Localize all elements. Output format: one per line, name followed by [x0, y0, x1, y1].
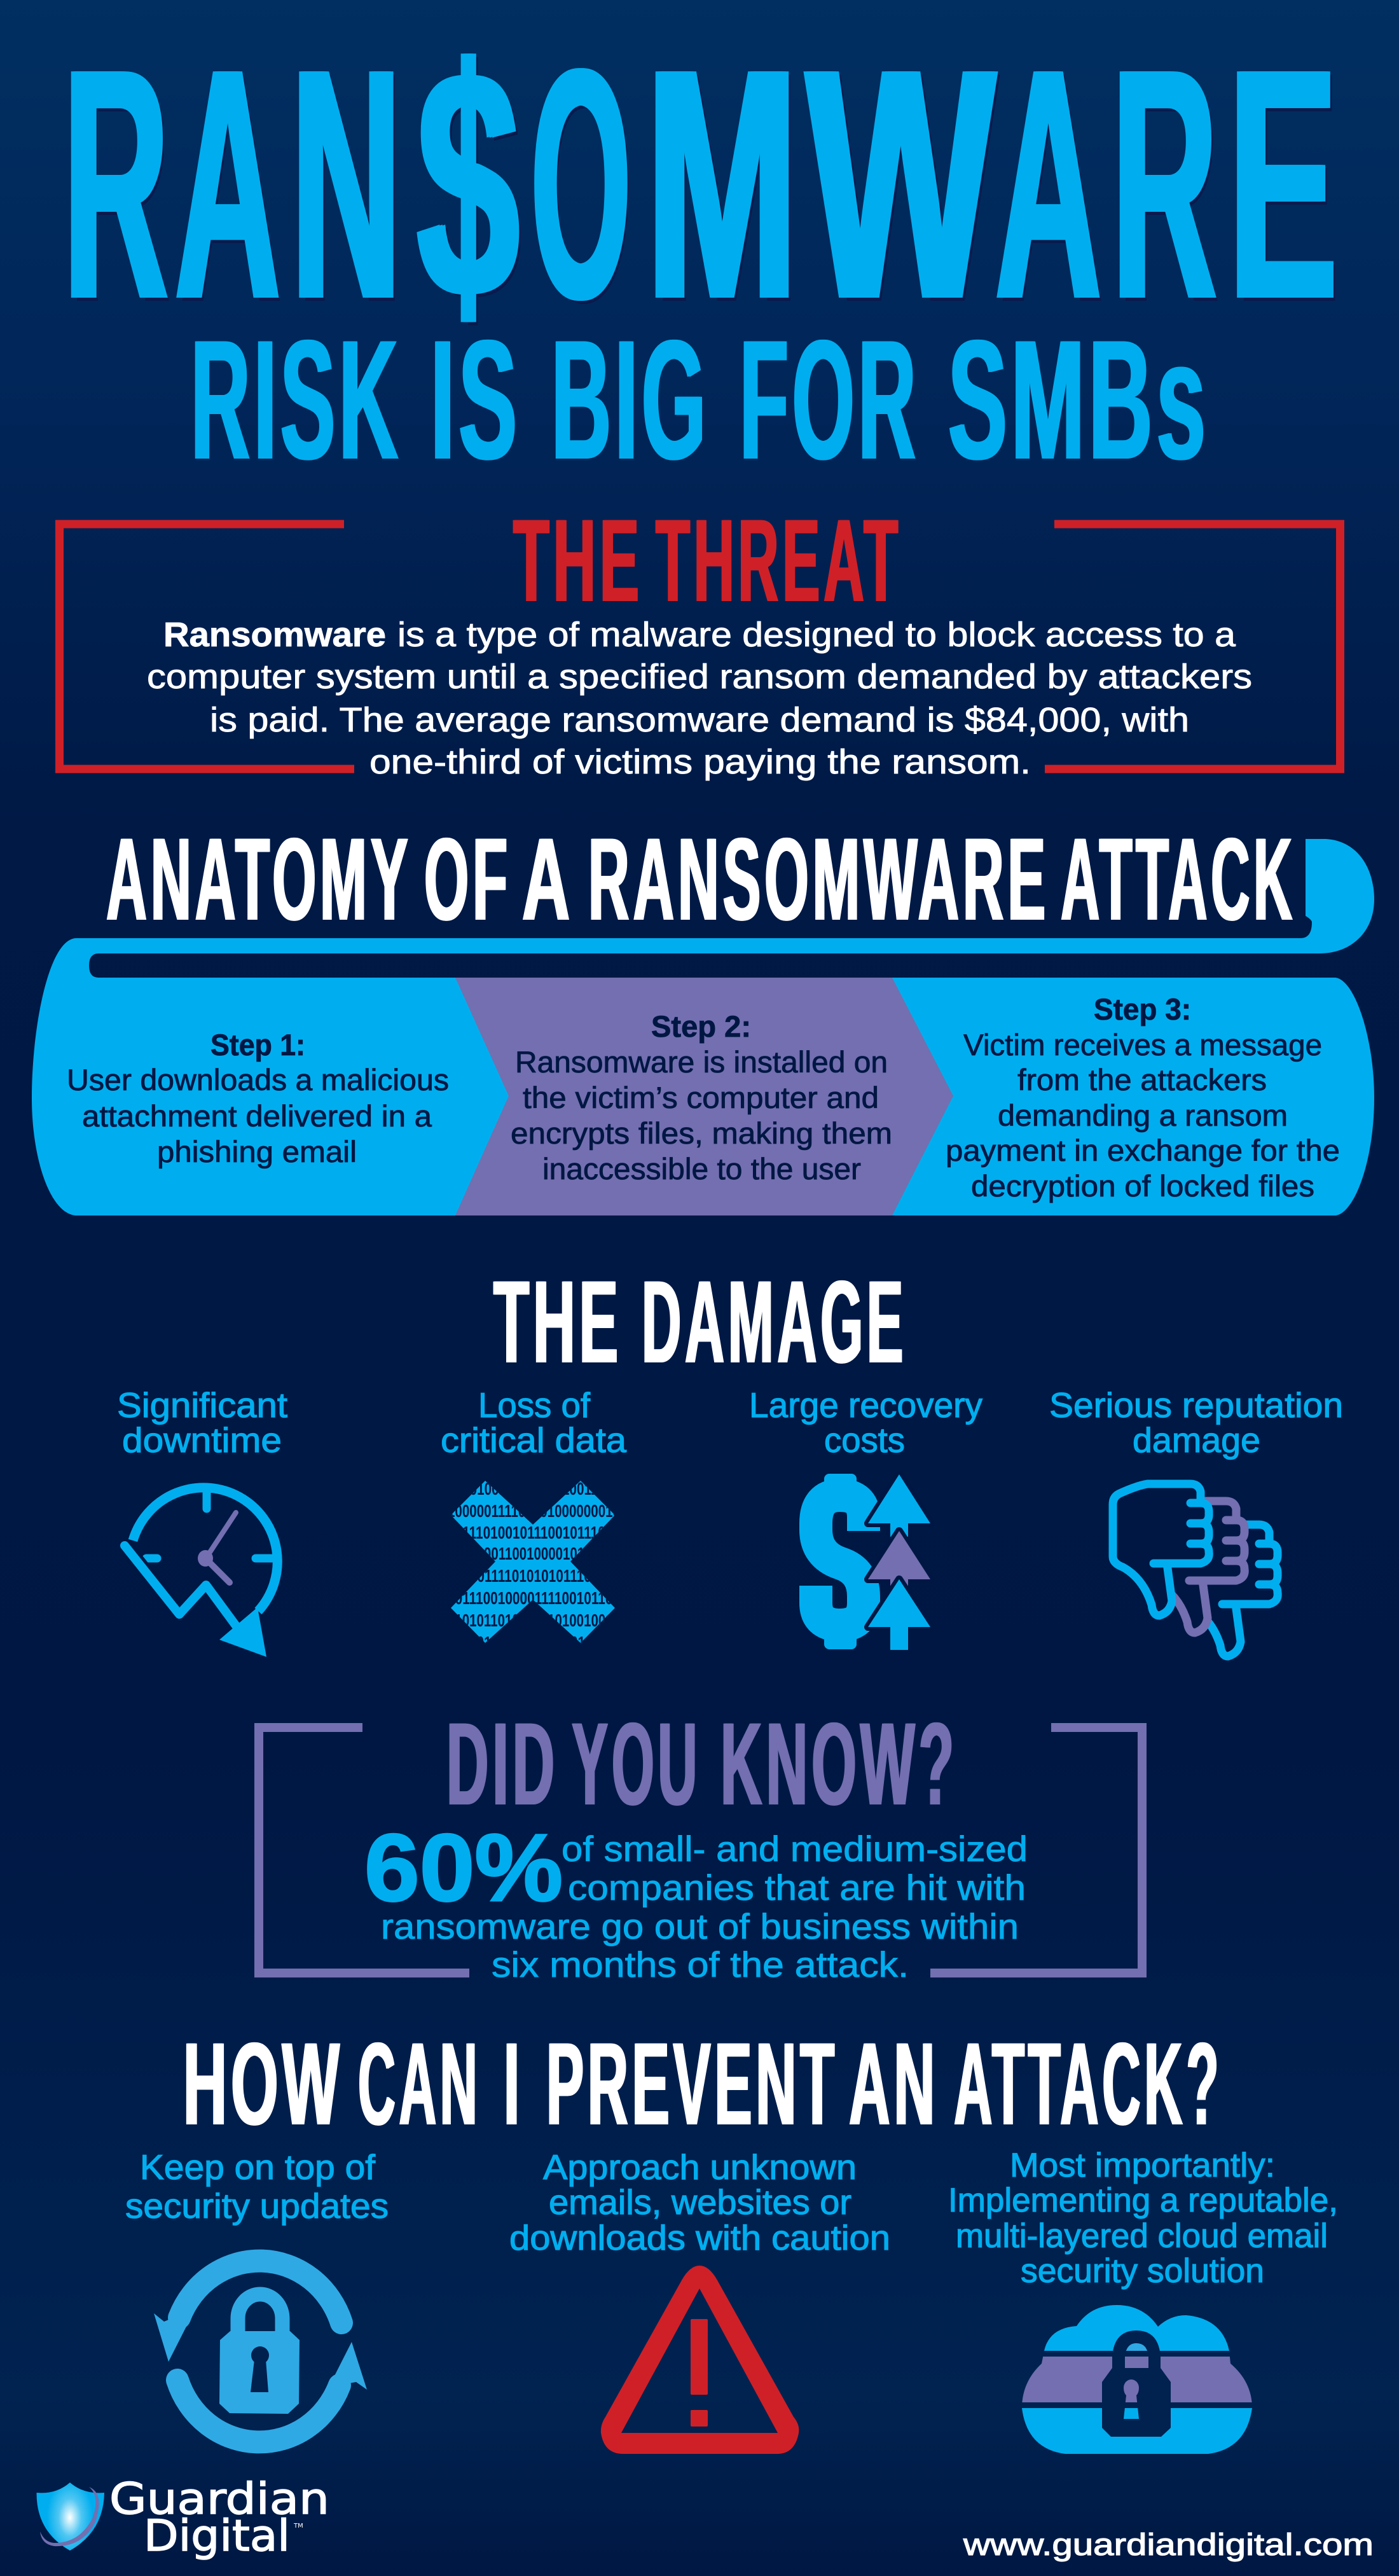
icon: binary X: 101110010000111100101100 [448, 1588, 620, 1608]
website url: www.guardiandigital.com [963, 2528, 1374, 2562]
label: downtime [122, 1420, 282, 1460]
text: DAMAGE [642, 1257, 907, 1388]
did you know body [381, 1829, 1028, 1984]
label [509, 2147, 890, 2257]
step 1 text: User downloads a malicious [67, 1063, 449, 1097]
did you know body: ransomware go out of business within [381, 1906, 1019, 1946]
label: Most importantly: [1010, 2147, 1275, 2184]
label [117, 1385, 287, 1460]
logo wordmark: TM [293, 2523, 303, 2530]
panel: did you know: KNOW? [720, 1699, 958, 1830]
label: security solution [1021, 2252, 1264, 2290]
step 1 text [67, 1028, 449, 1168]
step 3 text: payment in exchange for the [946, 1133, 1340, 1167]
icon: dollar and rising arrows [816, 1474, 930, 1650]
title: ransomware: M [646, 0, 798, 368]
step 2 text: the victim’s computer and [523, 1081, 879, 1114]
damage: serious reputation damage [1049, 1385, 1343, 1656]
heading: how can I prevent an attack: I [504, 2019, 523, 2150]
icon: cloud with padlock [1017, 2302, 1259, 2456]
title: ransomware: W [806, 0, 997, 368]
icon: clock with falling arrow [125, 1488, 277, 1657]
subtitle: risk is big for SMBs: IS [431, 304, 521, 495]
prevention: unknown emails caution [509, 2147, 890, 2454]
icon: three thumbs down [1113, 1484, 1279, 1656]
panel: the threat [60, 495, 1340, 781]
title: ransomware [64, 0, 1337, 368]
icon: binary X: 101001111010101011101011 [448, 1566, 620, 1586]
label: emails, websites or [549, 2182, 851, 2222]
did you know body: companies that are hit with [568, 1867, 1026, 1908]
heading: did you know: DID [446, 1699, 558, 1830]
step 3 text [946, 992, 1340, 1203]
label: Serious reputation [1049, 1385, 1343, 1425]
panel: attack steps ribbon [32, 839, 1374, 1215]
subtitle: risk is big for SMBs: RISK [191, 304, 402, 495]
label: damage [1133, 1420, 1260, 1460]
step 1 text: attachment delivered in a [82, 1099, 432, 1133]
label: Implementing a reputable, [948, 2182, 1338, 2219]
did you know body: six months of the attack. [492, 1944, 909, 1984]
threat body text: is a type of malware designed to block access to a [397, 616, 1236, 654]
step 2 text: inaccessible to the user [542, 1152, 861, 1186]
heading: anatomy of a ransomware attack: ANATOMY [106, 814, 411, 945]
threat body text [147, 616, 1252, 781]
threat body text: Ransomware [163, 616, 386, 654]
step 2 chevron [455, 978, 953, 1215]
title: ransomware: A [175, 0, 280, 368]
logo: guardian digital [36, 2474, 329, 2561]
subtitle: risk is big for SMBs: BIG [551, 304, 710, 495]
threat body text: one-third of victims paying the ransom. [369, 743, 1031, 781]
step 1 text: phishing email [157, 1135, 357, 1168]
label [1049, 1385, 1343, 1460]
icon: binary X: 100101010010110100111001 [448, 1633, 620, 1652]
title: ransomware: R [64, 0, 169, 368]
step 1 text: Step 1: [210, 1028, 305, 1062]
icon: binary X: 010101101010011010010010 [448, 1610, 620, 1630]
label: Keep on top of [140, 2147, 376, 2187]
threat body text: computer system until a specified ransom demanded by attackers [147, 658, 1252, 696]
heading: how can I prevent an attack: HOW [183, 2019, 343, 2150]
label [125, 2147, 389, 2226]
step 3 text: from the attackers [1017, 1063, 1267, 1097]
title: ransomware: O [531, 0, 631, 368]
ribbon shape [32, 839, 1374, 1215]
title: ransomware: A [995, 0, 1101, 368]
icon: binary X: 010100011001000010100110 [448, 1544, 620, 1563]
label: Approach unknown [543, 2147, 857, 2187]
subtitle: risk is big for SMBs: FOR [740, 304, 920, 495]
title: ransomware: $ [417, 0, 519, 368]
damage: significant downtime [117, 1385, 287, 1657]
label: Significant [117, 1385, 287, 1425]
icon: shield [36, 2483, 104, 2551]
label: costs [824, 1420, 905, 1460]
damage: loss of critical data [441, 1385, 626, 1652]
threat frame [60, 524, 1340, 769]
logo wordmark: Digital [144, 2511, 290, 2561]
title: ransomware: N [291, 0, 401, 368]
60% stat: 60% [364, 1814, 563, 1921]
label: multi-layered cloud email [956, 2217, 1328, 2255]
did you know frame [259, 1728, 1142, 1973]
logo wordmark: Guardian [109, 2474, 329, 2524]
label: Large recovery [749, 1385, 982, 1425]
label [948, 2147, 1338, 2290]
damage: large recovery costs [749, 1385, 982, 1650]
title: ransomware: R [1112, 0, 1217, 368]
icon: binary X: 100000111101001000000010 [448, 1501, 620, 1521]
step 3 text: demanding a ransom [998, 1098, 1288, 1132]
step 3 text: decryption of locked files [971, 1169, 1314, 1203]
label [749, 1385, 982, 1460]
icon: binary X: 001110100101110010111010 [448, 1523, 620, 1542]
icon: binary X: 010010011100101110011000 [448, 1479, 620, 1499]
icon: warning triangle [601, 2266, 799, 2454]
heading: anatomy of a ransomware attack: OF [424, 814, 511, 945]
heading: the damage: THE [493, 1257, 622, 1388]
step 2 text: Step 2: [651, 1009, 751, 1043]
label: security updates [125, 2186, 389, 2226]
heading: how can I prevent an attack: CAN [358, 2019, 481, 2150]
threat body text: is paid. The average ransomware demand is $84,000, with [210, 701, 1189, 739]
step 2 text: Ransomware is installed on [515, 1045, 888, 1079]
heading: anatomy of a ransomware attack: A [522, 814, 572, 945]
step 3 text: Victim receives a message [963, 1028, 1322, 1062]
logo wordmark [109, 2474, 329, 2561]
heading: how can I prevent an attack: AN [849, 2019, 939, 2150]
heading: the threat: THE [513, 495, 643, 627]
label: downloads with caution [509, 2218, 890, 2257]
heading: how can I prevent an attack: PREVENT [546, 2019, 838, 2150]
prevention: cloud email security [948, 2147, 1338, 2456]
step 2 text: encrypts files, making them [511, 1116, 892, 1150]
step 2 text [511, 1009, 892, 1186]
label: critical data [441, 1420, 626, 1460]
icon: binary X [451, 1481, 615, 1643]
label: Loss of [478, 1385, 591, 1425]
icon: padlock with refresh arrows [154, 2261, 367, 2442]
step 3 text: Step 3: [1094, 992, 1191, 1026]
panel: the threat: THREAT [656, 495, 902, 627]
panel: did you know [259, 1699, 1142, 1984]
did you know body: of small- and medium-sized [562, 1829, 1028, 1869]
label [441, 1385, 626, 1460]
heading: did you know: YOU [572, 1699, 701, 1830]
prevention: security updates [125, 2147, 389, 2442]
